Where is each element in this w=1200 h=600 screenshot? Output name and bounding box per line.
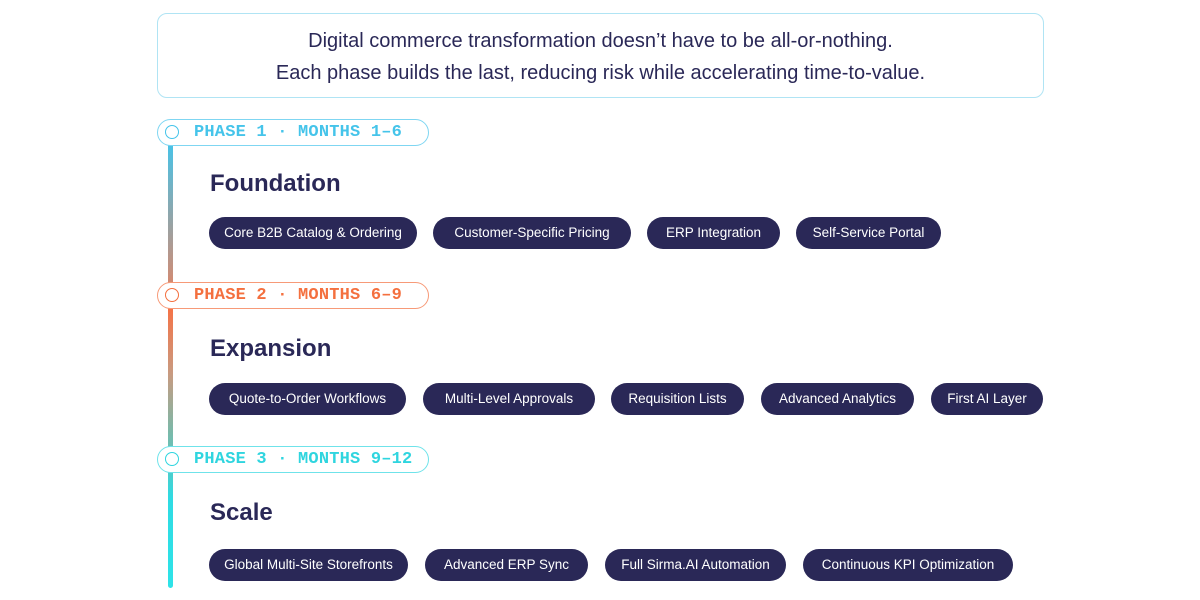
heading: Foundation: Foundation — [210, 170, 341, 197]
chips: phase 2: First AI Layer — [947, 391, 1027, 406]
chips: phase 3: Full Sirma.AI Automation — [621, 557, 770, 572]
chips: phase 3: Advanced ERP Sync — [444, 557, 569, 572]
chips: phase 1: Core B2B Catalog & Ordering — [224, 225, 402, 240]
intro callout — [157, 13, 1044, 98]
chips: phase 3: Global Multi-Site Storefronts — [224, 557, 393, 572]
heading: Expansion: Expansion — [210, 335, 331, 362]
chips: phase 2: Multi-Level Approvals — [445, 391, 573, 406]
phase 2 pill: PHASE 2 · MONTHS 6–9 — [194, 286, 402, 305]
heading: Scale: Scale — [210, 499, 273, 526]
chips: phase 2: Advanced Analytics — [779, 391, 896, 406]
chips: phase 2 — [209, 383, 1043, 415]
intro callout: Digital commerce transformation doesn’t have to be all-or-nothing. — [308, 30, 893, 52]
chips: phase 3 — [209, 549, 1013, 581]
timeline line — [168, 140, 173, 588]
chips: phase 3: Continuous KPI Optimization — [822, 557, 994, 572]
chips: phase 2: Quote-to-Order Workflows — [229, 391, 386, 406]
phase 3 pill — [157, 446, 429, 473]
chips: phase 1: Customer-Specific Pricing — [454, 225, 610, 240]
phase 2 pill — [157, 282, 429, 309]
phase 3 pill: PHASE 3 · MONTHS 9–12 — [194, 450, 412, 469]
phase 1 pill: PHASE 1 · MONTHS 1–6 — [194, 123, 402, 142]
chips: phase 1: Self-Service Portal — [813, 225, 924, 240]
chips: phase 2: Requisition Lists — [628, 391, 727, 406]
intro callout: Each phase builds the last, reducing risk while accelerating time-to-value. — [276, 62, 925, 84]
chips: phase 1 — [209, 217, 941, 249]
chips: phase 1: ERP Integration — [666, 225, 761, 240]
phase 1 pill — [157, 119, 429, 146]
